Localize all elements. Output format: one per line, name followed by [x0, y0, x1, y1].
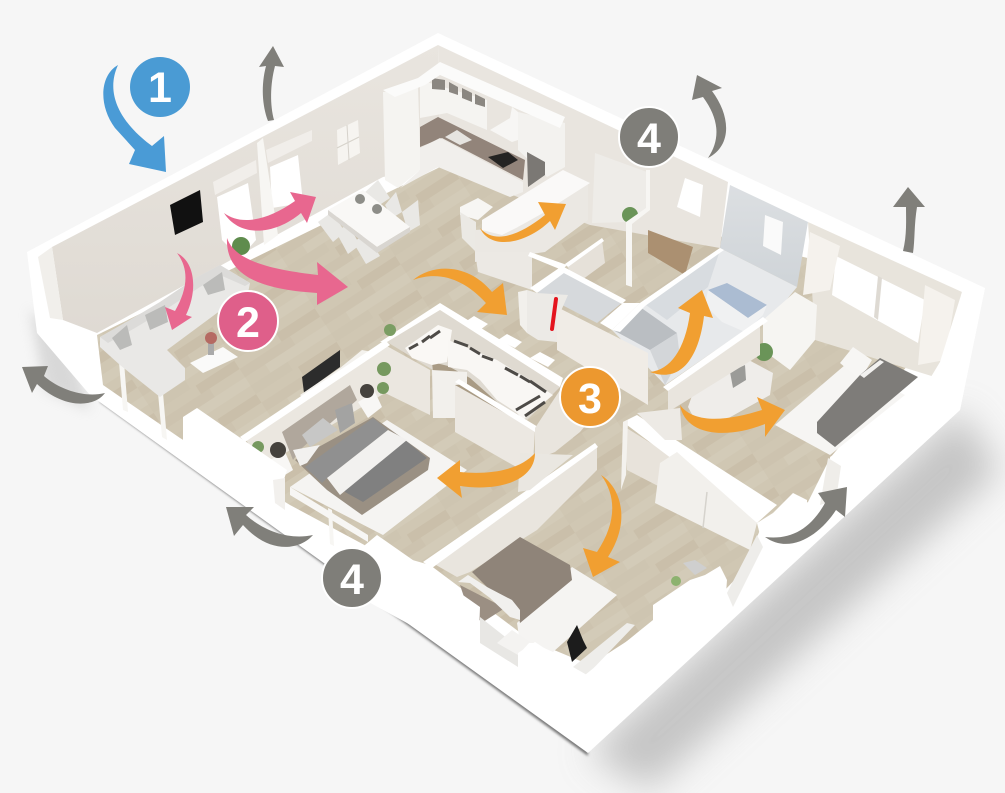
badge 2: 2: [236, 299, 260, 347]
tile side wall: [643, 250, 720, 320]
window frame: [480, 617, 518, 667]
oven: [527, 152, 545, 187]
nightstand right: [358, 392, 382, 418]
right upper cabinets: [518, 112, 565, 177]
door: [637, 408, 682, 440]
door: [518, 453, 573, 492]
small window: [677, 178, 703, 217]
wall top: [623, 415, 777, 523]
arrow: grey exhaust bottom: [226, 507, 313, 547]
closet inside walls: [387, 310, 560, 420]
bed lower: [460, 585, 505, 622]
badge 1: 1: [148, 64, 172, 112]
bathroom window: [763, 215, 783, 255]
closet top wall: [380, 303, 563, 387]
cooktop: [488, 152, 518, 168]
bedroom back wall: [808, 222, 962, 378]
lower cabinets: [400, 138, 523, 197]
door panel below island: [475, 252, 567, 290]
small wall panel: [567, 240, 605, 285]
partition wall top: [423, 443, 598, 568]
small bathroom: [530, 266, 626, 323]
badge 4 bottom: [322, 548, 382, 608]
front wall a: [183, 408, 287, 515]
badge 2: [218, 291, 278, 351]
arrow: pink to dining: [224, 192, 316, 231]
partition wall: [668, 325, 760, 412]
badge 4 top: 4: [637, 115, 661, 163]
closet left wall: [385, 345, 430, 415]
living room back wall: [52, 45, 440, 333]
range hood: [490, 107, 518, 142]
closet floor: [432, 362, 530, 425]
bedroom three: [423, 443, 635, 675]
pillows: [302, 418, 338, 447]
arrow: orange bedroom two: [680, 397, 785, 437]
arrow: orange bathroom: [650, 290, 713, 375]
wall top: [612, 248, 724, 332]
front wall d: [757, 488, 843, 570]
bed duvet: [305, 418, 388, 483]
arrow: blue incoming air: [103, 65, 166, 172]
front wall b: [365, 535, 480, 662]
front wall c: [518, 566, 727, 700]
tall cabinet: [383, 88, 420, 188]
countertop: [420, 117, 525, 180]
plants: [377, 362, 391, 394]
arrow: pink to living floor: [227, 238, 348, 305]
panel beside closet: [535, 387, 590, 460]
arrow: grey exhaust top left: [259, 46, 284, 121]
rug: [290, 420, 467, 535]
arrow: orange bedroom three: [583, 475, 621, 577]
white cabinet: [763, 292, 817, 370]
rug: [517, 567, 617, 652]
windows on living room wall: [213, 130, 312, 258]
plant in hallway: [384, 324, 396, 336]
blanket roll: [458, 575, 520, 620]
window posts: [119, 362, 128, 412]
arrow: grey exhaust top centre: [692, 75, 726, 158]
arrow: grey exhaust bottom right: [765, 487, 847, 544]
sofa in living room: [100, 265, 250, 397]
badge 4 bottom: 4: [340, 556, 364, 604]
wall face: [625, 427, 670, 487]
front wall blocks: [100, 237, 985, 700]
bedroom two: [663, 232, 955, 455]
plant by window: [232, 237, 250, 255]
lower right room: [621, 408, 777, 550]
arrow: grey exhaust left: [22, 366, 105, 404]
badge 3: 3: [578, 375, 602, 423]
bathroom floor: [612, 248, 797, 385]
top ledge: [383, 62, 565, 128]
door: [592, 153, 647, 223]
office chair: [567, 625, 587, 662]
left curtain: [803, 232, 840, 295]
flowers: [205, 332, 217, 355]
left wall end: [38, 247, 63, 320]
main bathroom: [600, 185, 808, 385]
master bedroom: [240, 340, 467, 535]
tile back wall: [720, 185, 808, 287]
plant: [755, 343, 773, 361]
headboard: [282, 385, 357, 460]
dining table and chairs: [318, 180, 420, 264]
bed base: [295, 417, 430, 515]
dark bed throw: [343, 440, 427, 502]
side table plant: [671, 576, 681, 586]
bed: [817, 358, 918, 447]
white couch: [573, 623, 635, 675]
building shadow: [30, 310, 1000, 790]
right curtain: [918, 285, 955, 365]
upper cabinets: [420, 80, 487, 130]
armchair: [688, 357, 773, 420]
sink: [445, 130, 472, 145]
badge 3: [560, 367, 620, 427]
badge 4 top: [619, 107, 679, 167]
arrow: grey exhaust top right: [893, 187, 925, 253]
partition wall: [626, 170, 650, 287]
arrow: orange hallway: [413, 269, 507, 315]
wall top: [240, 340, 390, 442]
door with red mark: [518, 290, 568, 342]
clothes: [405, 325, 452, 365]
closet front wall: [455, 385, 535, 468]
nightstand: [497, 630, 530, 655]
kitchen: [383, 62, 565, 197]
window frame: [727, 535, 763, 607]
kitchen island: [460, 170, 590, 262]
arrow: orange kitchen: [480, 202, 566, 242]
arrow: orange master bedroom: [437, 453, 535, 498]
wall-mounted tv: [170, 190, 203, 235]
arrow: pink to sofa: [165, 253, 193, 330]
bedroom window sill: [290, 487, 368, 542]
side table lamp: [683, 560, 707, 575]
bathtub: [708, 283, 767, 318]
white blanket band: [327, 430, 407, 495]
long white wall panel: [557, 307, 648, 405]
rug: [775, 365, 905, 455]
nightstand left: [270, 452, 293, 478]
tv on stand: [300, 350, 372, 405]
closet door: [432, 370, 467, 418]
back walls: [52, 45, 962, 378]
large window: [832, 256, 925, 343]
white sheet: [293, 445, 320, 466]
wood cabinet: [648, 230, 693, 275]
badge 1: [130, 57, 190, 117]
walk-in closet: [380, 303, 590, 468]
right wall: [830, 288, 985, 518]
white wardrobe: [655, 452, 757, 550]
coffee table: [190, 347, 238, 373]
kitchen and hallway back wall: [438, 45, 728, 248]
wood floor: [97, 167, 965, 665]
partition wall face: [436, 447, 597, 577]
plant: [622, 207, 638, 223]
bed: [472, 537, 572, 623]
vanity: [613, 307, 677, 350]
nightstand: [840, 347, 872, 380]
back wall face: [245, 347, 385, 467]
hallway room: [565, 153, 703, 287]
wall pictures: [337, 120, 360, 165]
